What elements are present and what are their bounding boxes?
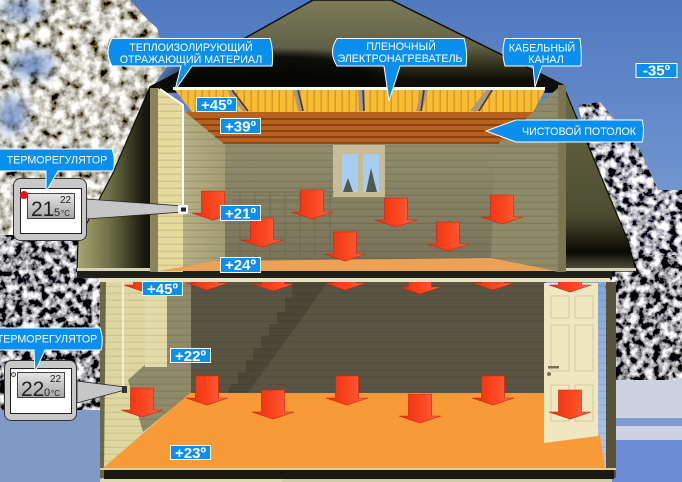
heating film xyxy=(175,90,545,112)
lcd readout: 22 xyxy=(50,374,62,385)
callout: film heater: ЭЛЕКТРОНАГРЕВАТЕЛЬ xyxy=(337,53,463,65)
lcd readout: 0 xyxy=(44,387,50,399)
reflective material and cable channel xyxy=(160,88,545,210)
callout: thermostat upper: ТЕРМОРЕГУЛЯТОР xyxy=(7,154,107,166)
right log edge xyxy=(558,85,566,272)
house: left lower roof xyxy=(77,87,160,271)
temperature: floor +24: +24º xyxy=(225,257,256,274)
lcd readout xyxy=(21,374,62,401)
lcd readout: 22 xyxy=(60,195,72,206)
thermostat upper xyxy=(14,178,188,240)
callout: film heater: ПЛЕНОЧНЫЙ xyxy=(366,40,436,53)
finish ceiling xyxy=(185,112,533,143)
eave xyxy=(77,268,636,282)
lcd readout xyxy=(31,195,72,221)
callout: finish ceiling: ЧИСТОВОЙ ПОТОЛОК xyxy=(522,125,637,138)
callout: cable channel xyxy=(503,38,581,87)
callout: cable channel: КАНАЛ xyxy=(528,54,564,66)
temperature: outside -35: -35º xyxy=(643,62,671,80)
right wall xyxy=(491,88,558,272)
lcd readout: 21 xyxy=(31,198,54,221)
callout: insulating reflective material: ТЕПЛОИЗОЛИРУЮЩИЙ xyxy=(129,41,253,54)
railing xyxy=(232,192,334,258)
floor xyxy=(158,258,556,271)
back wall xyxy=(190,282,546,394)
lcd readout: °C xyxy=(51,389,60,398)
left log edge xyxy=(100,282,107,478)
house: right lower roof xyxy=(558,85,636,271)
arrows upper floor xyxy=(192,190,523,261)
floor xyxy=(103,393,605,468)
temperature: film +45 upper: +45º xyxy=(201,97,232,114)
arrows floor lower floor xyxy=(121,376,591,423)
door xyxy=(544,283,598,443)
cable xyxy=(122,282,124,388)
lcd readout: 5 xyxy=(54,207,60,219)
floor base xyxy=(100,468,616,482)
left wall xyxy=(104,282,191,468)
callout: insulating reflective material xyxy=(108,38,273,90)
window xyxy=(333,145,385,197)
temperature: room +22: +22º xyxy=(175,348,206,365)
temperature: film +45 lower: +45º xyxy=(147,281,178,298)
house: gable xyxy=(150,0,563,92)
temperature: floor +23: +23º xyxy=(175,445,206,462)
lower floor room xyxy=(100,261,616,482)
left wall xyxy=(158,88,225,272)
back wall xyxy=(222,110,502,262)
gable shadow xyxy=(155,48,405,108)
left log edge xyxy=(150,88,158,272)
background: frosted tree left xyxy=(0,0,167,482)
thermostat lower xyxy=(4,360,127,420)
upper floor room xyxy=(150,85,566,272)
temperature: ceiling +39: +39º xyxy=(225,118,256,136)
background: frosted trees and snow right xyxy=(578,102,682,482)
sensor xyxy=(178,205,188,214)
callout: film heater xyxy=(332,38,467,101)
temperature: outside -35 xyxy=(636,62,677,80)
stairs xyxy=(225,282,328,401)
temperature: room +21: +21º xyxy=(225,206,256,222)
window xyxy=(145,282,167,367)
lcd readout: 22 xyxy=(21,378,44,401)
callout: cable channel: КАБЕЛЬНЫЙ xyxy=(509,42,575,54)
callout: finish ceiling xyxy=(486,120,644,142)
callout: thermostat upper xyxy=(0,149,114,192)
sensor xyxy=(122,386,127,393)
callout: insulating reflective material: ОТРАЖАЮЩИЙ МАТЕРИАЛ xyxy=(120,53,262,66)
lcd readout: °C xyxy=(61,209,70,218)
right log edge xyxy=(606,282,616,478)
callout: thermostat lower xyxy=(0,328,102,372)
arrows ceiling lower floor xyxy=(124,282,592,294)
